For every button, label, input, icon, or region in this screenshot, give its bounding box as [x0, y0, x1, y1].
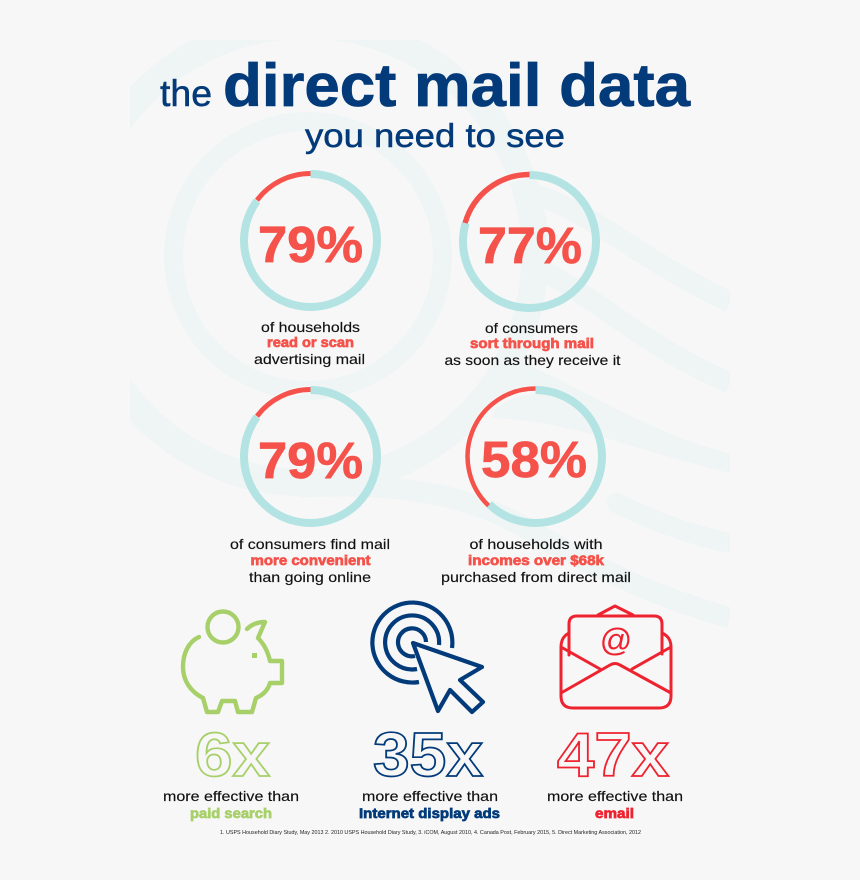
caption [359, 788, 500, 821]
icon: open envelope: @ [600, 622, 632, 658]
donut chart: 77% [463, 174, 596, 308]
caption [254, 319, 365, 367]
caption: of households [261, 319, 360, 335]
title: the [160, 73, 212, 114]
stat panel: 58% of households [441, 388, 631, 585]
caption [441, 536, 631, 585]
title: you need to see [305, 117, 565, 154]
caption: of households with [470, 536, 602, 552]
icon: open envelope [561, 606, 671, 708]
caption: of consumers [485, 320, 578, 336]
title: direct mail data [223, 52, 691, 119]
caption: of consumers find mail [230, 536, 390, 552]
donut chart: 58% [468, 388, 602, 523]
caption [230, 536, 390, 585]
caption: than going online [249, 569, 371, 585]
multiplier: 6x: 6x [195, 721, 271, 790]
caption: more effective than [362, 788, 498, 804]
caption: purchased from direct mail [441, 569, 631, 585]
caption: more effective than [163, 788, 299, 804]
caption: more effective than [547, 788, 683, 804]
percentage: 58% [481, 431, 587, 488]
caption: sort through mail [470, 335, 594, 351]
caption: advertising mail [254, 351, 365, 367]
multiplier: 35x: 35x [373, 721, 484, 790]
percentage: 77% [478, 217, 582, 274]
stat panel: 77% of consumers [444, 174, 621, 368]
percentage: 79% [258, 216, 363, 273]
donut chart: 79% [244, 390, 377, 523]
caption: as soon as they receive it [444, 352, 621, 368]
caption: incomes over $68k [468, 552, 604, 568]
caption: more convenient [250, 552, 371, 568]
caption: read or scan [267, 334, 354, 350]
stat panel: 79% of consumers [230, 390, 390, 585]
donut chart: 79% [244, 174, 377, 307]
caption [547, 788, 683, 821]
caption: paid search [190, 805, 272, 821]
icon: target with cursor [372, 603, 483, 712]
comparison panel: paid search [163, 612, 299, 821]
caption [444, 320, 621, 368]
comparison panel: email [547, 606, 683, 821]
caption [163, 788, 299, 821]
caption: email [595, 805, 634, 821]
title [160, 52, 691, 154]
multiplier: 47x: 47x [557, 721, 670, 790]
percentage: 79% [258, 432, 363, 489]
footnote: sources: 1. USPS Household Diary Study, May 2013 2. 2010 USPS Household Diary Study, 3. iCOM, August 2010, 4. Canada Post, February 2015, 5. Direct Marketing Association, 2012 [220, 830, 641, 836]
caption: Internet display ads [359, 805, 500, 821]
comparison panel: internet display ads [359, 603, 500, 821]
background watermark pattern [77, 25, 730, 618]
icon: piggy bank [183, 612, 282, 712]
stat panel: 79% of households [244, 174, 377, 367]
